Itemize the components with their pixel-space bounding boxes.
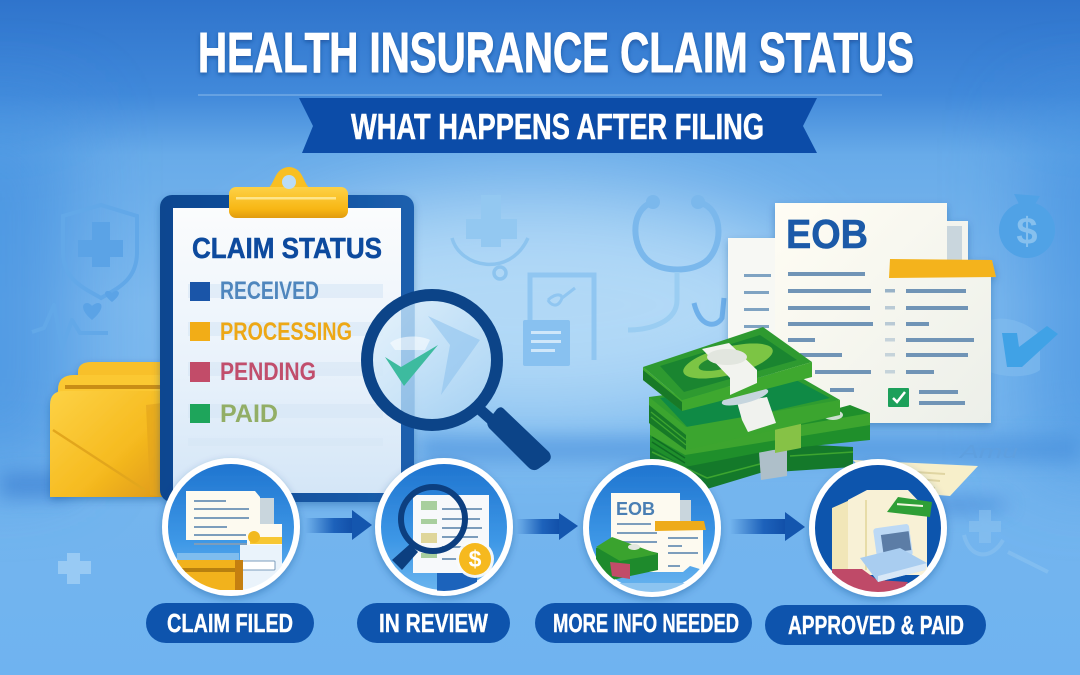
folder front [50, 391, 162, 497]
folder tab middle [58, 375, 162, 395]
label: claim filed: CLAIM FILED [167, 608, 293, 638]
label: in review: IN REVIEW [379, 608, 488, 638]
status: pending [190, 358, 316, 386]
icon: ghost shield with cross [63, 205, 137, 298]
signature sheet: Amu [958, 442, 1018, 462]
signature sheet [853, 442, 1018, 496]
label: in review [357, 603, 510, 643]
label: approved and paid: APPROVED & PAID [788, 610, 964, 640]
yellow folders [50, 362, 162, 497]
icon: ghost heartbeat and hearts [32, 291, 119, 348]
back sheet right [940, 221, 968, 281]
icon: ghost checkmark [990, 319, 1058, 376]
clipboard [160, 167, 414, 502]
step 2: in review icon [378, 461, 510, 593]
status: processing [190, 318, 352, 346]
main EOB sheet [775, 203, 991, 423]
back sheet left [728, 238, 780, 368]
clipboard paper [173, 208, 401, 493]
money stack [643, 327, 870, 489]
icon: ghost bottom-right plus [964, 510, 1048, 572]
clipboard board [160, 195, 414, 502]
magnifying glass [367, 295, 551, 470]
arrow: step 3 to 4 [730, 512, 805, 541]
EOB documents [728, 203, 996, 423]
step 2: in review icon: $ [469, 546, 482, 572]
yellow tab [889, 259, 996, 278]
green check box [888, 388, 909, 407]
icon: ghost dollar bag [999, 194, 1055, 258]
arrow: step 1 to 2 [305, 510, 372, 540]
label: more info needed [535, 603, 752, 643]
status: paid: PAID [220, 400, 278, 428]
icon: ghost bottom-left plus [58, 553, 91, 584]
folder tab back [78, 362, 162, 380]
EOB heading: EOB [786, 211, 868, 257]
step 4: approved and paid icon [812, 462, 944, 600]
check mark [385, 345, 438, 386]
status: received: RECEIVED [220, 277, 319, 305]
status: pending: PENDING [220, 358, 316, 386]
bottom bundle [650, 440, 853, 489]
magnifier handle [476, 406, 551, 470]
top bundle [643, 327, 812, 411]
status: paid [190, 400, 278, 428]
icon: ghost document [523, 275, 594, 366]
third bundle [650, 405, 870, 467]
magnifier ring [367, 295, 497, 425]
label: more info needed: MORE INFO NEEDED [553, 608, 739, 638]
clipboard heading: CLAIM STATUS [192, 233, 382, 265]
subtitle banner [198, 94, 882, 153]
step 1: claim filed icon [165, 461, 297, 593]
label: approved and paid [765, 605, 986, 645]
step 3: more info needed icon [586, 462, 718, 595]
status: received [190, 277, 319, 305]
icon: ghost medical cross with arc [452, 195, 528, 279]
subtitle banner: WHAT HAPPENS AFTER FILING [351, 106, 764, 147]
clipboard clip [229, 167, 348, 218]
step 3: more info needed icon: EOB [616, 499, 655, 519]
icon: ghost stethoscope [628, 195, 724, 330]
icon: ghost dollar bag: $ [1016, 211, 1038, 253]
arrow: step 2 to 3 [516, 513, 578, 540]
label: claim filed [146, 603, 314, 643]
EOB text lines [788, 272, 974, 405]
status: processing: PROCESSING [220, 318, 352, 346]
second bundle [649, 377, 840, 450]
